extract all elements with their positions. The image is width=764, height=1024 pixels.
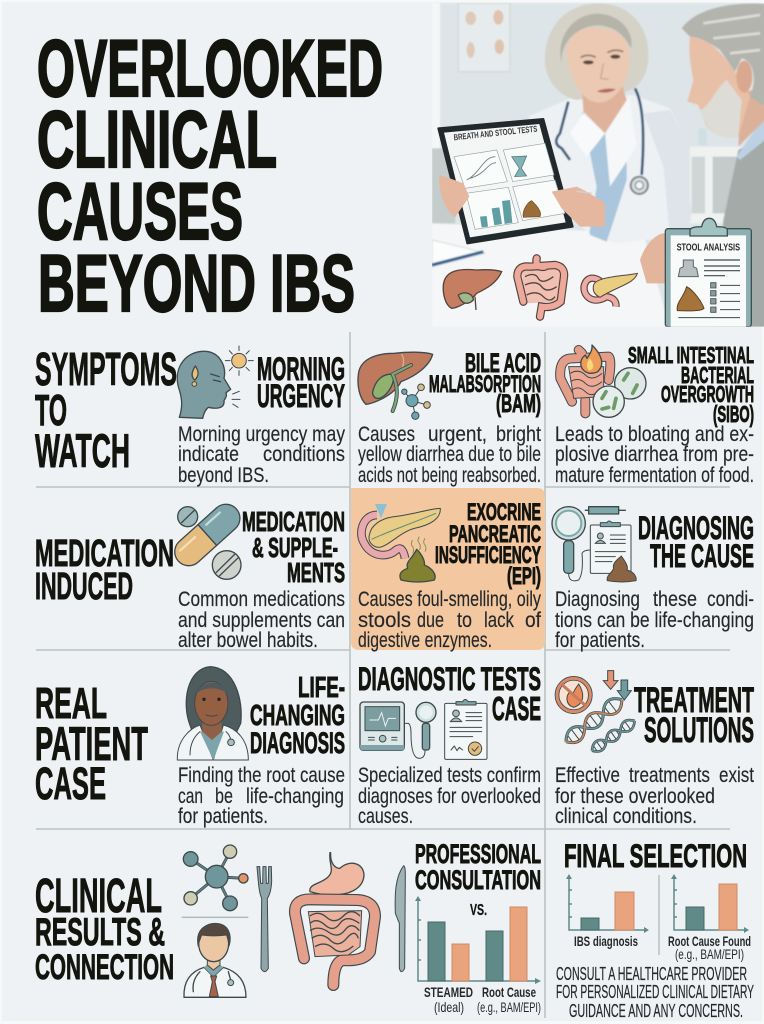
panel: symptoms to watch heading: WATCH — [35, 424, 130, 477]
panel: real patient case heading: CASE — [35, 758, 106, 809]
panel: real patient case heading — [35, 679, 148, 809]
text: SIBO — [555, 423, 754, 487]
hands — [439, 175, 469, 217]
panel: symptoms to watch heading: TO — [35, 386, 67, 435]
bar chart: steamed vs root cause: Root Cause — [482, 984, 536, 1000]
text: EPI: digestive enzymes. — [358, 629, 492, 652]
text: diagnosing the cause — [555, 588, 754, 652]
text: bile acid malabsorption — [358, 423, 541, 487]
text: diagnostic tests: Specialized tests confirm — [358, 764, 541, 787]
bar chart: steamed vs root cause — [415, 896, 541, 1015]
text: bile acid malabsorption: yellow diarrhea due to bile — [358, 443, 541, 466]
heading: EPI: (EPI) — [507, 563, 541, 590]
panel: clinical results heading — [35, 870, 174, 987]
text: life-changing diagnosis: life-changing — [246, 785, 344, 808]
panel: real patient case heading: REAL — [35, 679, 107, 728]
panel: medication induced heading — [35, 533, 174, 608]
text: life-changing diagnosis — [178, 764, 345, 828]
text: medication & supplements — [178, 588, 345, 652]
pancreas — [584, 278, 616, 307]
heading: medication & supplements: MEDICATION — [242, 506, 345, 537]
bar chart: steamed vs root cause: STEAMED — [424, 984, 473, 1000]
text: treatment solutions: Effective — [555, 764, 620, 787]
text: treatment solutions: clinical conditions. — [555, 805, 697, 828]
text: bile acid malabsorption: acids not being reabsorbed. — [358, 464, 541, 487]
panel: medication induced heading: MEDICATION — [35, 533, 174, 575]
heading: EPI: EXOCRINE — [467, 499, 541, 526]
text: life-changing diagnosis: can — [178, 785, 203, 808]
title: CAUSES — [37, 167, 243, 257]
panel: clinical results heading: CLINICAL — [35, 870, 162, 923]
heading: EPI — [435, 499, 541, 590]
hero photo: doctor showing tests to patient: STOOL ANALYSIS — [677, 243, 740, 254]
heading: life-changing diagnosis: DIAGNOSIS — [250, 727, 345, 760]
heading: bile acid malabsorption: BILE ACID — [465, 348, 541, 378]
text: EPI: Causes foul-smelling, oily — [358, 588, 541, 611]
heading: morning urgency — [257, 351, 345, 414]
icon: pills — [169, 498, 246, 579]
clipboard — [665, 229, 751, 327]
text: medication & supplements: Common medications — [178, 588, 345, 611]
icon: no-fire, arrows, DNA — [557, 671, 638, 755]
text: morning urgency: beyond IBS. — [178, 464, 269, 487]
heading: diagnostic tests case — [358, 661, 541, 727]
text: EPI: of — [525, 609, 541, 632]
panel: medication induced heading: INDUCED — [35, 566, 133, 608]
heading: treatment solutions — [634, 681, 754, 750]
text: EPI: due — [417, 609, 444, 632]
heading: bile acid malabsorption: (BAM) — [496, 390, 541, 418]
icon: knife — [395, 866, 405, 972]
heading: morning urgency: MORNING — [257, 351, 345, 387]
text: diagnosing the cause: Diagnosing — [555, 588, 640, 611]
icon: magnifier, syringe, clipboard — [552, 507, 636, 582]
bar chart: steamed vs root cause: VS. — [470, 902, 487, 919]
tablet — [438, 119, 573, 243]
grid dividers — [36, 332, 730, 1018]
panel: EPI highlight — [351, 488, 545, 650]
text: morning urgency: Morning urgency may — [178, 423, 345, 446]
hero photo: doctor showing tests to patient — [432, 3, 764, 333]
heading: bile acid malabsorption: MALABSORPTION — [429, 371, 541, 398]
heading: medication & supplements: & SUPPLE- — [252, 532, 338, 563]
bar chart: steamed vs root cause: (e.g., BAM/EPI) — [477, 999, 541, 1015]
text: morning urgency: indicate — [178, 443, 239, 466]
heading: medication & supplements — [242, 506, 345, 588]
icon: liver with molecule — [358, 352, 433, 419]
intestine — [522, 268, 562, 303]
heading: morning urgency: URGENCY — [257, 378, 345, 414]
liver — [443, 269, 502, 308]
icon: intestine with flame and bacteria — [560, 345, 646, 417]
text: medication & supplements: alter bowel habits. — [178, 629, 318, 652]
doctor coat — [529, 95, 670, 240]
text: life-changing diagnosis: Finding the root cause — [178, 764, 345, 787]
text: morning urgency: conditions — [263, 443, 345, 466]
panel: symptoms to watch heading: SYMPTOMS — [35, 343, 177, 395]
icon: monitor, magnifier, report — [360, 699, 487, 759]
heading: professional consultation: CONSULTATION — [415, 865, 541, 895]
heading: life-changing diagnosis — [250, 672, 345, 760]
heading: EPI: INSUFFICIENCY — [435, 542, 541, 569]
title: CLINICAL — [37, 95, 277, 185]
title — [37, 24, 383, 329]
heading: life-changing diagnosis: CHANGING — [250, 700, 345, 732]
text: diagnostic tests: causes. — [358, 805, 413, 828]
bar chart: steamed vs root cause: (Ideal) — [434, 999, 464, 1015]
text: bile acid malabsorption: Causes — [358, 423, 415, 446]
text: bile acid malabsorption: urgent, — [428, 423, 487, 446]
icon: stomach and intestines — [295, 853, 375, 985]
heading: bile acid malabsorption — [429, 348, 541, 418]
text: bile acid malabsorption: bright — [496, 423, 541, 446]
panel: symptoms to watch heading — [35, 343, 177, 477]
panel: clinical results heading: CONNECTION — [35, 948, 174, 987]
text: diagnosing the cause: condi- — [707, 588, 754, 611]
bar chart: IBS diagnosis: IBS diagnosis — [574, 933, 638, 949]
heading: professional consultation: PROFESSIONAL — [415, 839, 541, 869]
text: life-changing diagnosis: be — [215, 785, 233, 808]
icon: female doctor — [177, 667, 248, 760]
text: treatment solutions: exist — [719, 764, 754, 787]
text: EPI: lack — [484, 609, 514, 632]
hero photo: doctor showing tests to patient: BREATH AND STOOL TESTS — [453, 124, 538, 142]
text: EPI: to — [457, 609, 472, 632]
title: BEYOND IBS — [38, 239, 355, 329]
text: diagnosing the cause: for patients. — [555, 629, 645, 652]
text: treatment solutions: for these overlooked — [555, 785, 715, 808]
heading: diagnostic tests case: CASE — [492, 690, 541, 727]
patient — [717, 133, 764, 333]
panel: real patient case heading: PATIENT — [35, 717, 148, 770]
text: EPI — [358, 588, 541, 652]
text: life-changing diagnosis: for patients. — [178, 805, 268, 828]
heading: life-changing diagnosis: LIFE- — [298, 672, 345, 704]
icon: pancreas with stool — [361, 504, 440, 582]
panel: clinical results heading: RESULTS & — [35, 911, 165, 954]
text: treatment solutions: treatments — [629, 764, 710, 787]
bar chart: IBS diagnosis — [566, 874, 649, 949]
icon: molecule, doctor, fork — [182, 845, 272, 997]
icon: head with sun — [177, 346, 253, 418]
title: OVERLOOKED — [37, 24, 383, 114]
text: diagnostic tests — [358, 764, 541, 828]
text: morning urgency — [178, 423, 345, 487]
heading: EPI: PANCREATIC — [449, 521, 541, 548]
bar chart: root cause found — [668, 874, 751, 962]
hair back — [545, 3, 648, 100]
heading: SIBO — [628, 342, 754, 427]
heading: diagnosing the cause — [638, 510, 754, 574]
heading: medication & supplements: MENTS — [287, 557, 345, 588]
heading: professional consultation — [415, 839, 541, 895]
text: diagnostic tests: diagnoses for overlooked — [358, 785, 541, 808]
text: medication & supplements: and supplements can — [178, 609, 345, 632]
text: consult a healthcare provider — [556, 964, 754, 1021]
text: EPI: stools — [358, 609, 411, 632]
heading: diagnostic tests case: DIAGNOSTIC TESTS — [358, 661, 541, 697]
text: diagnosing the cause: these — [653, 588, 697, 611]
text: treatment solutions — [555, 764, 754, 828]
